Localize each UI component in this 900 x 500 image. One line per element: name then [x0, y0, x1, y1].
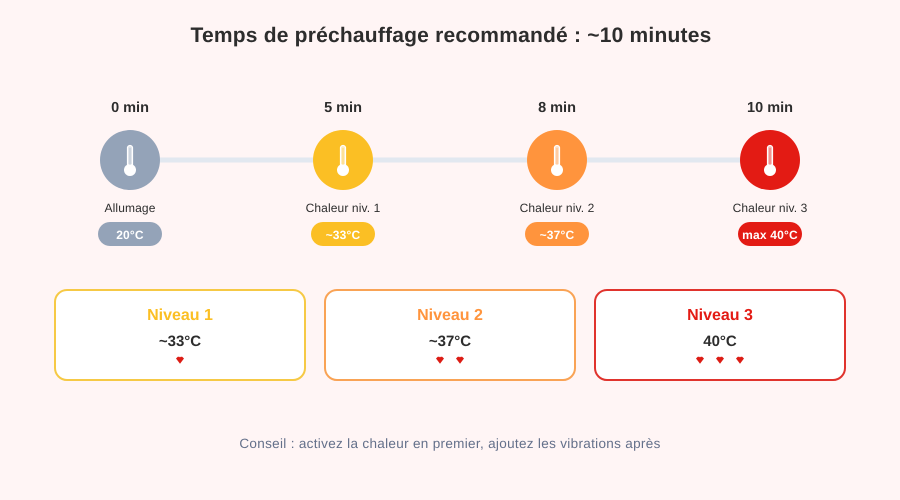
step: 5 min: Chaleur niv. 1 [306, 201, 381, 215]
panel: niveau 3: 40°C [703, 333, 737, 350]
title: Temps de préchauffage recommandé : ~10 minutes [190, 24, 712, 47]
panel: niveau 1: Niveau 1 [147, 307, 213, 324]
step: 5 min: ~33°C [326, 228, 361, 242]
footer tip: Conseil : activez la chaleur en premier, ajoutez les vibrations après [239, 436, 661, 451]
step: 10 min: 10 min [747, 100, 793, 116]
panel: niveau 3 [595, 290, 845, 380]
panel: niveau 3: Niveau 3 [687, 307, 753, 324]
step: 5 min [306, 100, 381, 246]
step: 10 min: max 40°C [742, 228, 798, 242]
step: 8 min: Chaleur niv. 2 [520, 201, 595, 215]
panel: niveau 2: ~37°C [429, 333, 471, 350]
step: 0 min: 20°C [116, 228, 144, 242]
step: 8 min [520, 100, 595, 246]
step: 10 min [733, 100, 808, 246]
panel: niveau 1 [55, 290, 305, 380]
step: 8 min: 8 min [538, 100, 576, 116]
panel: niveau 2 [325, 290, 575, 380]
step: 8 min: ~37°C [540, 228, 575, 242]
step: 0 min: 0 min [111, 100, 149, 116]
step: 5 min: 5 min [324, 100, 362, 116]
step: 10 min: Chaleur niv. 3 [733, 201, 808, 215]
step: 0 min: Allumage [104, 201, 156, 215]
step: 0 min [98, 100, 162, 246]
panel: niveau 1: ~33°C [159, 333, 201, 350]
timeline connector [160, 158, 740, 162]
panel: niveau 2: Niveau 2 [417, 307, 483, 324]
